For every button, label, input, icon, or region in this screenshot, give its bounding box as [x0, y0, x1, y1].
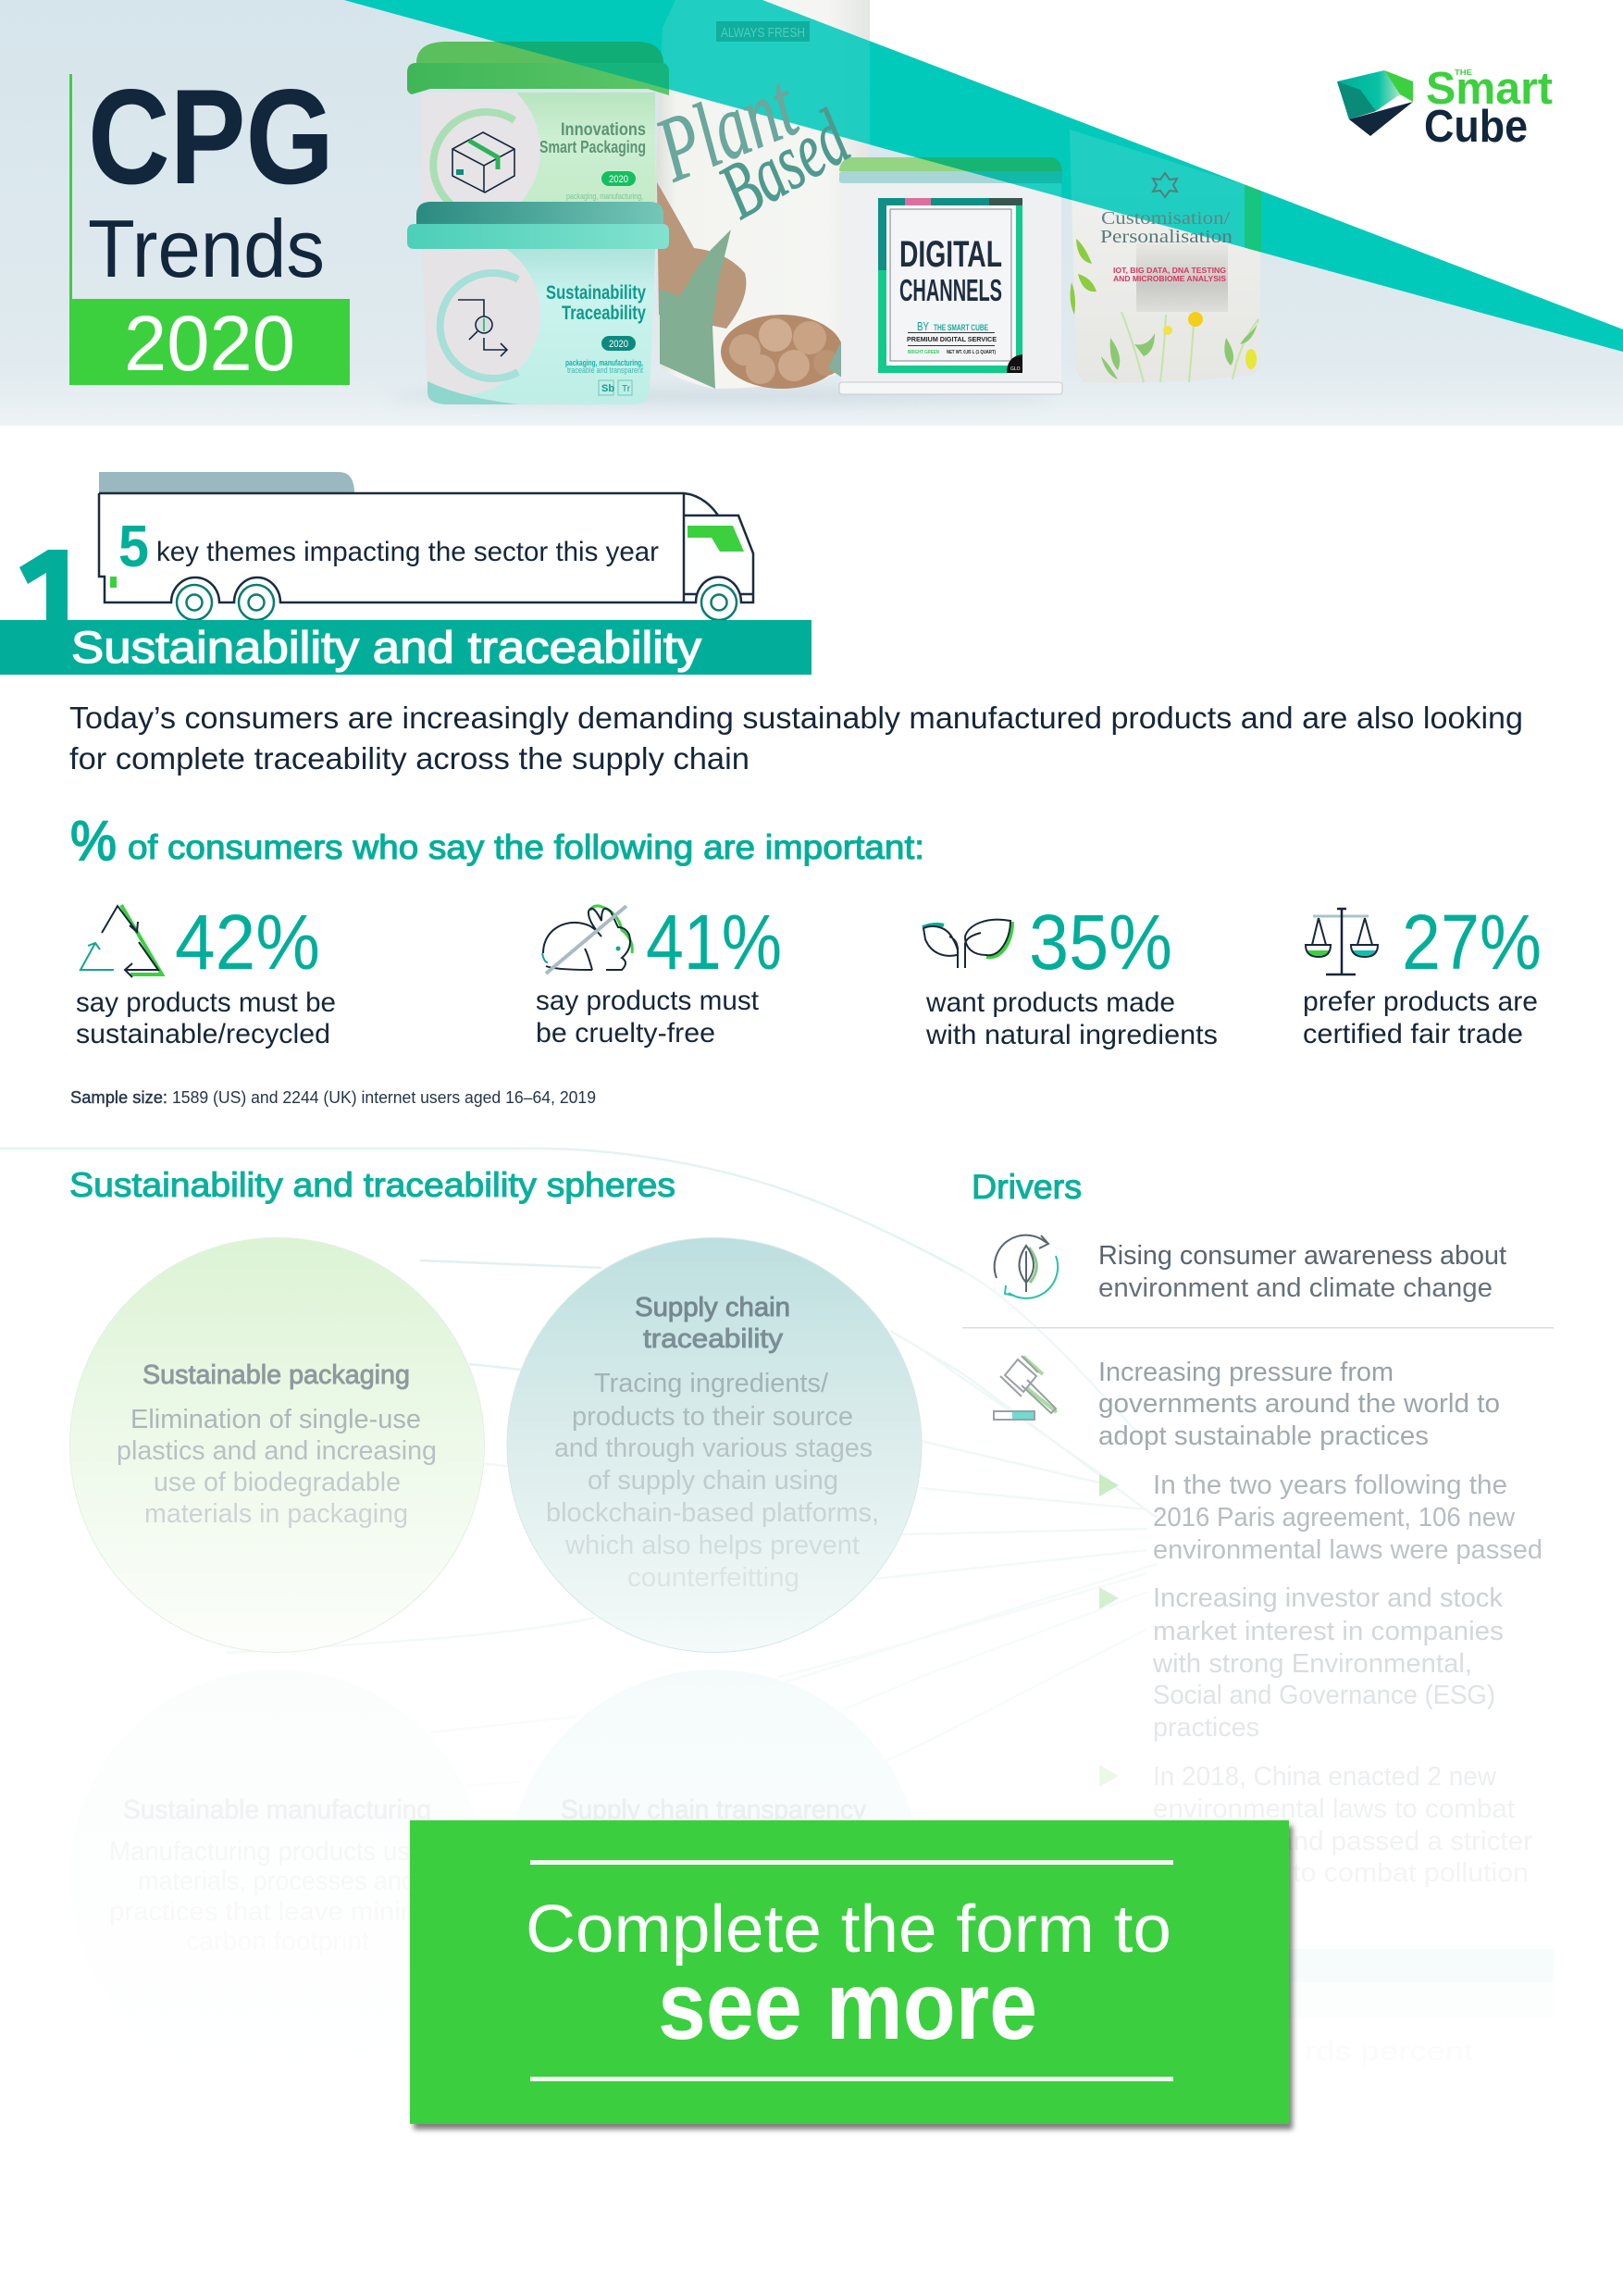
sample size note: 1589 (US) and 2244 (UK) internet users aged 16–64, 2019	[172, 1088, 596, 1107]
driver: consumer awareness: environment and climate change	[1098, 1273, 1493, 1303]
panel: hero header	[0, 0, 1623, 426]
sphere: sustainable manufacturing: materials, processes and	[138, 1867, 415, 1896]
driver: government pressure: adopt sustainable practices	[1098, 1421, 1429, 1451]
sphere: supply chain traceability: of supply chain using	[588, 1466, 838, 1496]
sphere: supply chain traceability: Tracing ingredients/	[594, 1369, 829, 1398]
sphere: sustainable packaging: plastics and and increasing	[117, 1436, 437, 1466]
logo: The Smart Cube: Smart	[1426, 64, 1553, 114]
product: innovations smart packaging jar: packaging, manufacturing,	[566, 192, 643, 202]
stat: 41 percent cruelty-free: say products must	[536, 986, 760, 1016]
icon: parcel box	[452, 132, 514, 192]
stat: 27 percent fair trade: certified fair trade	[1303, 1019, 1523, 1049]
product: sustainability traceability jar	[422, 249, 655, 404]
sphere: supply chain traceability: blockchain-based platforms,	[546, 1498, 879, 1528]
bullet: China laws: and passed a stricter	[1278, 1827, 1532, 1856]
sample size note: Sample size:	[70, 1088, 167, 1107]
big numeral 1	[19, 550, 68, 622]
sphere: supply chain traceability: counterfeitting	[627, 1563, 799, 1593]
product: customisation pouch	[1070, 130, 1260, 383]
bullet: investor interest: market interest in companies	[1153, 1617, 1504, 1646]
product: sustainability traceability jar: packaging, manufacturing,	[565, 358, 643, 368]
driver: government pressure: governments around the world to	[1098, 1389, 1500, 1419]
logo: The Smart Cube: Cube	[1424, 102, 1528, 152]
sphere: sustainable manufacturing: Sustainable manufacturing	[123, 1795, 431, 1825]
pouch label text: IOT, BIG DATA, DNA TESTING	[1113, 267, 1226, 275]
logo: The Smart Cube: THE	[1455, 68, 1473, 77]
bullet: Paris agreement: 2016 Paris agreement, 106 new	[1153, 1503, 1516, 1533]
truck caption: 5 key themes: key themes impacting the sector this year	[156, 537, 659, 567]
product: digital channels tin: CHANNELS	[899, 273, 1002, 307]
intro paragraph: Today’s consumers are increasingly demanding sustainably manufactured products and are also looking	[69, 701, 1523, 735]
product: sustainability traceability jar: Sustainability	[546, 282, 646, 304]
stat: 41 percent cruelty-free	[536, 899, 782, 1049]
product: plant based pouch	[655, 0, 870, 389]
product: innovations smart packaging jar: Smart Packaging	[539, 138, 646, 156]
title: CPG Trends 2020: 2020	[124, 300, 295, 387]
sphere: sustainable packaging	[70, 1238, 485, 1653]
stat: 27 percent fair trade	[1303, 899, 1542, 1049]
bullet: investor interest: Social and Governance (ESG)	[1153, 1681, 1495, 1710]
icon: sprout	[923, 920, 1012, 968]
product: sustainability traceability jar: Traceability	[562, 303, 646, 324]
pouch lettering: Plant Based: Based	[705, 93, 863, 235]
title: CPG Trends 2020: CPG	[88, 61, 334, 212]
heading: percent of consumers	[70, 810, 924, 872]
stat: 35 percent natural: 35%	[1029, 899, 1172, 986]
icon: leaf in cycle	[995, 1235, 1058, 1298]
sphere: sustainable manufacturing: carbon footprint	[186, 1927, 369, 1956]
driver: government pressure	[994, 1356, 1500, 1451]
teal diagonal band	[344, 0, 1623, 352]
panel: theme 1 header with truck	[0, 472, 812, 675]
icon: gavel	[994, 1356, 1057, 1420]
sphere: sustainable packaging: Elimination of single-use	[130, 1405, 421, 1434]
bullet: Paris agreement: environmental laws were passed	[1153, 1535, 1542, 1565]
section banner	[0, 620, 812, 675]
bullet: investor interest	[1099, 1583, 1504, 1743]
intro paragraph	[69, 701, 1523, 776]
product: sustainability traceability jar: traceable and transparent	[567, 366, 643, 375]
driver: government pressure: Increasing pressure from	[1098, 1358, 1394, 1387]
icon: truck	[99, 472, 753, 620]
stat: 42 percent sustainable: say products must be	[76, 987, 336, 1018]
sphere: supply chain traceability: which also helps prevent	[564, 1531, 860, 1560]
heading: percent of consumers: %	[70, 810, 117, 872]
product: digital channels tin: BRIGHT GREEN	[908, 350, 939, 355]
stat: 41 percent cruelty-free: be cruelty-free	[536, 1018, 715, 1049]
sphere: sustainable manufacturing: practices that leave minimal	[109, 1897, 444, 1927]
stat: 42 percent sustainable: sustainable/recycled	[76, 1019, 330, 1049]
sphere: sustainable manufacturing	[70, 1669, 485, 2084]
call to action: complete the form: see more	[658, 1953, 1037, 2060]
bullet: China laws: In 2018, China enacted 2 new	[1153, 1762, 1497, 1792]
bullet: China laws: environmental laws to combat	[1153, 1794, 1515, 1824]
logo: The Smart Cube	[1337, 69, 1553, 143]
pouch label text: Customisation/	[1101, 208, 1231, 229]
product: digital channels tin: DIGITAL	[899, 234, 1002, 275]
stat: 41 percent cruelty-free: 41%	[646, 899, 782, 986]
bullet: investor interest: practices	[1153, 1713, 1259, 1743]
product: digital channels tin	[839, 157, 1062, 394]
product: digital channels tin: BY	[917, 319, 929, 333]
icon: crossed-out rabbit	[542, 906, 632, 974]
bullet: investor interest: with strong Environmental,	[1152, 1649, 1472, 1679]
heading: drivers: Drivers	[972, 1168, 1082, 1206]
sphere: supply chain traceability: products to their source	[572, 1402, 853, 1432]
pouch lettering: Plant Based: Plant	[642, 54, 812, 202]
stat: 42 percent sustainable	[76, 899, 336, 1049]
bullet: China laws: to combat pollution	[1293, 1858, 1529, 1888]
stat: 35 percent natural: with natural ingredients	[925, 1020, 1218, 1050]
product: sustainability traceability jar: Tr	[622, 384, 631, 394]
call to action: complete the form: Complete the form to	[526, 1893, 1171, 1967]
panel: spheres	[69, 1166, 922, 2084]
stat: 35 percent natural	[923, 899, 1218, 1050]
stat: 27 percent fair trade: 27%	[1402, 899, 1542, 986]
icon: magnifier traceability	[458, 300, 507, 356]
product: jar lids	[407, 42, 669, 249]
bullet: Paris agreement: In the two years following the	[1153, 1471, 1507, 1500]
title: CPG Trends 2020: Trends	[88, 203, 325, 294]
sphere: supply chain traceability: and through various stages	[554, 1433, 873, 1463]
call to action: complete the form	[410, 1820, 1289, 2124]
product: innovations smart packaging jar: Innovations	[561, 120, 646, 140]
product: digital channels tin: PREMIUM DIGITAL SERVICE	[907, 337, 997, 343]
panel: hero header: ALWAYS FRESH	[721, 25, 805, 41]
title: CPG Trends 2020	[69, 61, 350, 387]
bullet: investor interest: Increasing investor and stock	[1153, 1583, 1503, 1613]
bullet: Paris agreement	[1099, 1471, 1542, 1565]
truck caption: 5 key themes: 5	[118, 513, 149, 579]
faded callout box: rds percent	[1305, 2037, 1473, 2066]
product: sustainability traceability jar: Sb	[601, 383, 614, 394]
product: sustainability traceability jar: 2020	[609, 339, 628, 350]
sphere: sustainable packaging: Sustainable packaging	[142, 1360, 410, 1390]
bullet: China laws	[1099, 1762, 1532, 1888]
driver: consumer awareness	[995, 1235, 1506, 1303]
icon: balance scales	[1306, 909, 1378, 974]
stat: 35 percent natural: want products made	[925, 987, 1175, 1018]
pouch lettering: Plant Based	[657, 83, 851, 220]
pouch label text: Personalisation	[1100, 227, 1233, 247]
driver: consumer awareness: Rising consumer awareness about	[1098, 1241, 1506, 1271]
truck caption: 5 key themes	[118, 513, 659, 579]
sphere: supply chain traceability	[507, 1238, 922, 1653]
section banner: Sustainability and traceability	[71, 624, 701, 673]
pouch label text	[1100, 173, 1233, 283]
icon: recycling triangle	[81, 905, 162, 977]
faint background connector lines	[0, 1148, 1157, 1786]
product: innovations smart packaging jar: 2020	[609, 174, 628, 185]
heading: percent of consumers: of consumers who say the following are important:	[128, 828, 924, 866]
sphere: sustainable packaging: materials in packaging	[144, 1499, 408, 1529]
sphere: supply chain traceability: Supply chain	[635, 1293, 790, 1322]
product: digital channels tin: THE SMART CUBE	[934, 323, 988, 332]
product: digital channels tin: NET WT. 0,05 L (1 QUART)	[947, 350, 996, 355]
stat: 42 percent sustainable: 42%	[175, 899, 320, 986]
sphere: sustainable packaging: use of biodegradable	[154, 1468, 401, 1497]
panel: drivers	[962, 1168, 1554, 2066]
product: innovations smart packaging jar	[422, 93, 655, 202]
sphere: supply chain transparency	[507, 1669, 922, 2084]
pouch label text: AND MICROBIOME ANALYSIS	[1113, 275, 1227, 283]
sphere: supply chain transparency: Supply chain transparency	[561, 1795, 866, 1825]
sphere: supply chain traceability: traceability	[643, 1324, 784, 1354]
sphere: sustainable manufacturing: Manufacturing products using	[109, 1837, 444, 1867]
stat: 27 percent fair trade: prefer products are	[1303, 987, 1538, 1017]
heading: spheres: Sustainability and traceability spheres	[69, 1166, 675, 1204]
faded callout box	[1203, 1949, 1554, 2066]
intro paragraph: for complete traceability across the supply chain	[69, 741, 750, 776]
product: digital channels tin: GLO	[1010, 366, 1021, 372]
